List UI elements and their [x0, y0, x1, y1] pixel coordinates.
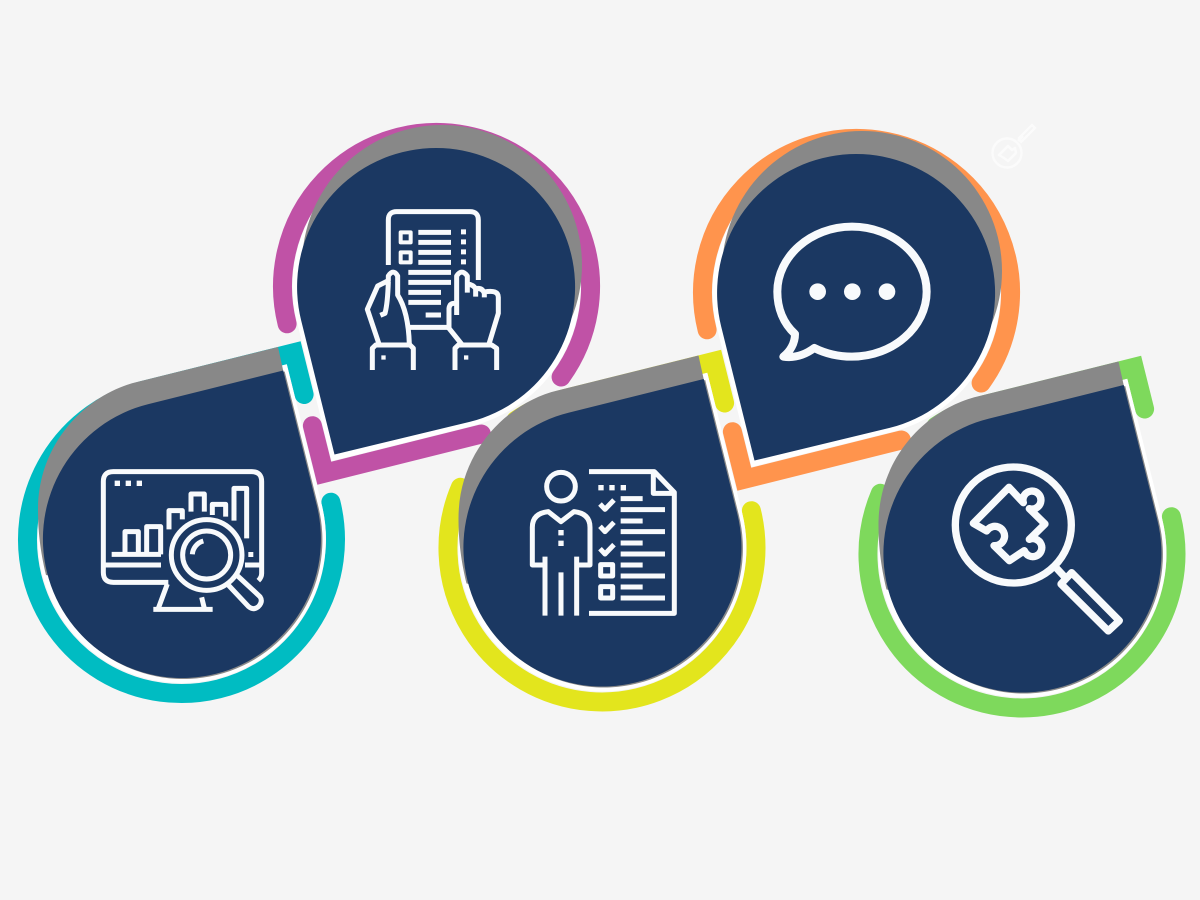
panel: step 1 teardrop (teal) — [27, 347, 335, 694]
ring: green outline with gap — [868, 367, 1176, 708]
ring: teal outline — [27, 353, 335, 694]
panel: step 5 teardrop (green) — [868, 362, 1176, 708]
panel: step 4 teardrop (orange) — [703, 131, 1011, 479]
icon: person beside a checklist document — [532, 472, 674, 616]
icon: faint watermark magnifier — [992, 125, 1035, 168]
ring: yellow outline with gap — [448, 361, 756, 702]
icon: magnifier over a puzzle piece — [955, 467, 1119, 631]
icon: hands on a checklist tablet — [367, 212, 498, 370]
icon: speech bubble with three dots — [777, 227, 927, 357]
panel: step 2 teardrop (purple) — [283, 125, 591, 473]
panel: step 3 teardrop (yellow) — [448, 356, 756, 702]
icon: monitor with bar chart and magnifier — [103, 472, 262, 609]
